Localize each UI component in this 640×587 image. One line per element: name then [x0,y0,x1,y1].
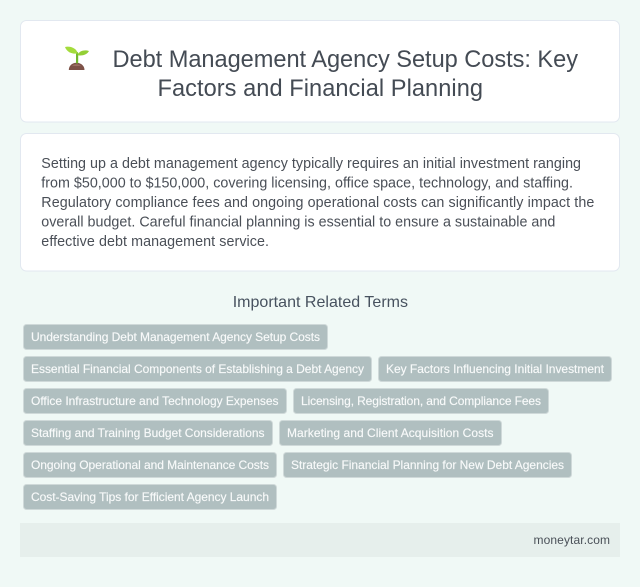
title [112,47,578,102]
tag [24,484,276,510]
tag [24,388,286,414]
tag: Essential Financial Components of Establishing a Debt Agency [31,362,364,376]
heading: important related terms: Important Related Terms [233,294,408,311]
tag: Marketing and Client Acquisition Costs [287,426,494,440]
tag: Cost-Saving Tips for Efficient Agency Launch [31,490,269,504]
text block: description: Regulatory compliance fees and ongoing operational costs can significantly impact the [41,195,594,211]
text block: description: from $50,000 to $150,000, covering licensing, office space, technology, and staffing. [41,176,573,192]
tag: Staffing and Training Budget Considerations [31,426,264,440]
tag: Licensing, Registration, and Compliance Fees [301,394,541,408]
tag: Key Factors Influencing Initial Investment [386,362,605,376]
tag [24,356,372,382]
panel: description [20,134,620,271]
panel: related term tags [24,324,612,510]
tag: Understanding Debt Management Agency Setup Costs [31,330,320,344]
icon: seedling [65,47,89,70]
tag [24,420,272,446]
text block: description: Setting up a debt management agency typically requires an initial investment ranging [41,156,581,172]
tag [284,452,572,478]
footer [20,523,620,557]
text block: description [41,156,594,250]
tag: Strategic Financial Planning for New Debt Agencies [291,458,564,472]
text block: description: overall budget. Careful financial planning is essential to ensure a sustainable and [41,214,555,230]
tag [378,356,612,382]
title: Factors and Financial Planning [158,76,483,102]
panel: title header [20,20,620,122]
footer source text: moneytar.com [534,533,610,547]
title: Debt Management Agency Setup Costs: Key [112,47,578,73]
tag: Office Infrastructure and Technology Expenses [31,394,278,408]
tag [24,324,328,350]
tag [24,452,276,478]
tag [294,388,548,414]
tag [280,420,502,446]
tag: Ongoing Operational and Maintenance Costs [31,458,269,472]
text block: description: effective debt management service. [41,234,269,250]
